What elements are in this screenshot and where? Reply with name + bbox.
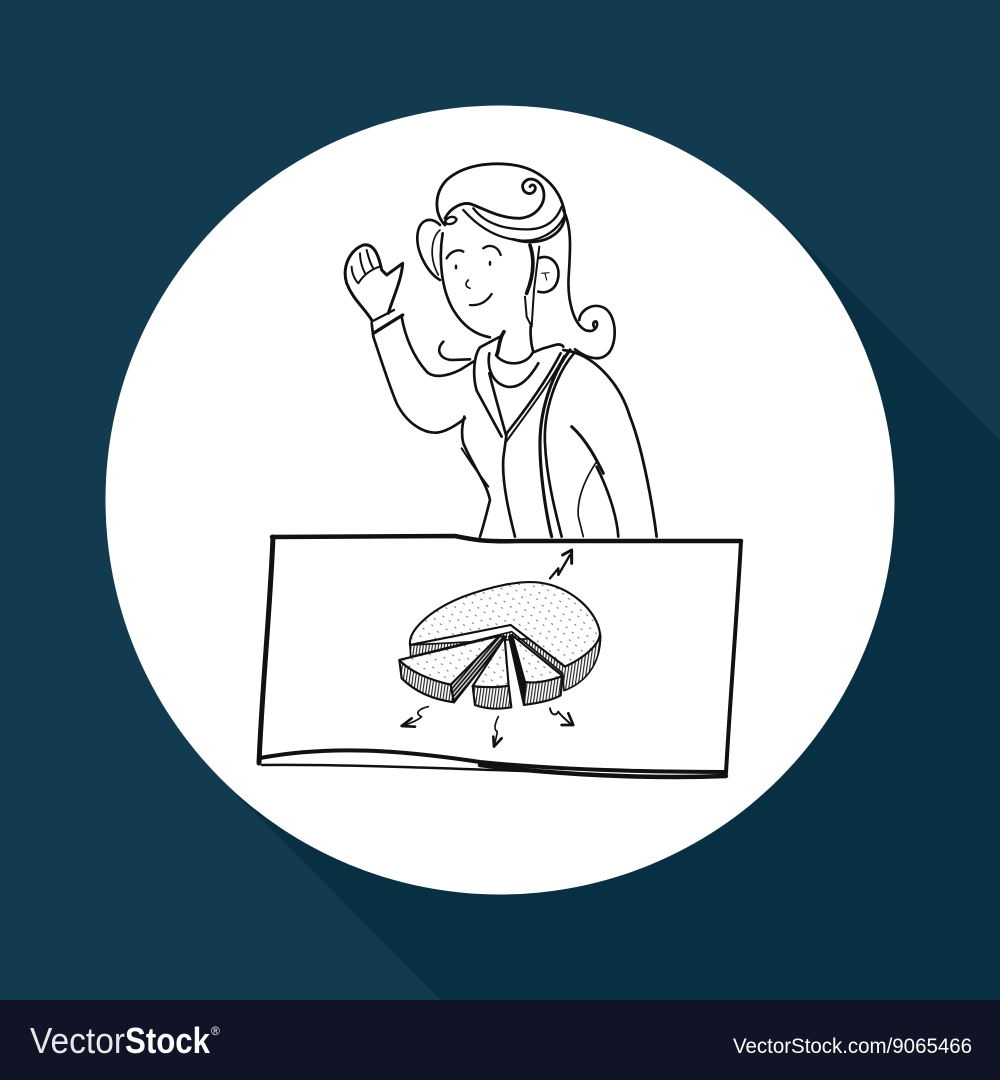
footer logo: Stock [125,1020,211,1061]
left slice [399,636,506,702]
growth arrows [402,550,573,747]
arrow: down left [402,707,428,727]
raised arm and hand [345,245,473,433]
right slice [509,635,563,705]
pie chart [399,582,601,709]
woman figure [345,164,657,537]
footer logo [30,1020,220,1061]
footer logo: Vector [30,1020,125,1061]
arrow: up right [550,550,572,578]
footer image id: VectorStock.com/9065466 [733,1035,972,1058]
arrow: down [493,717,502,747]
main pie body [410,582,601,691]
presentation board [259,536,741,777]
arrow: down right [550,708,573,725]
footer bar [0,1000,1000,1080]
middle slice [473,637,511,709]
white circle [106,106,894,894]
face [441,233,558,337]
long shadow of circle [221,219,1000,1000]
hair [417,164,615,358]
jacket and shirt [462,327,657,537]
footer logo: ® [211,1024,220,1038]
